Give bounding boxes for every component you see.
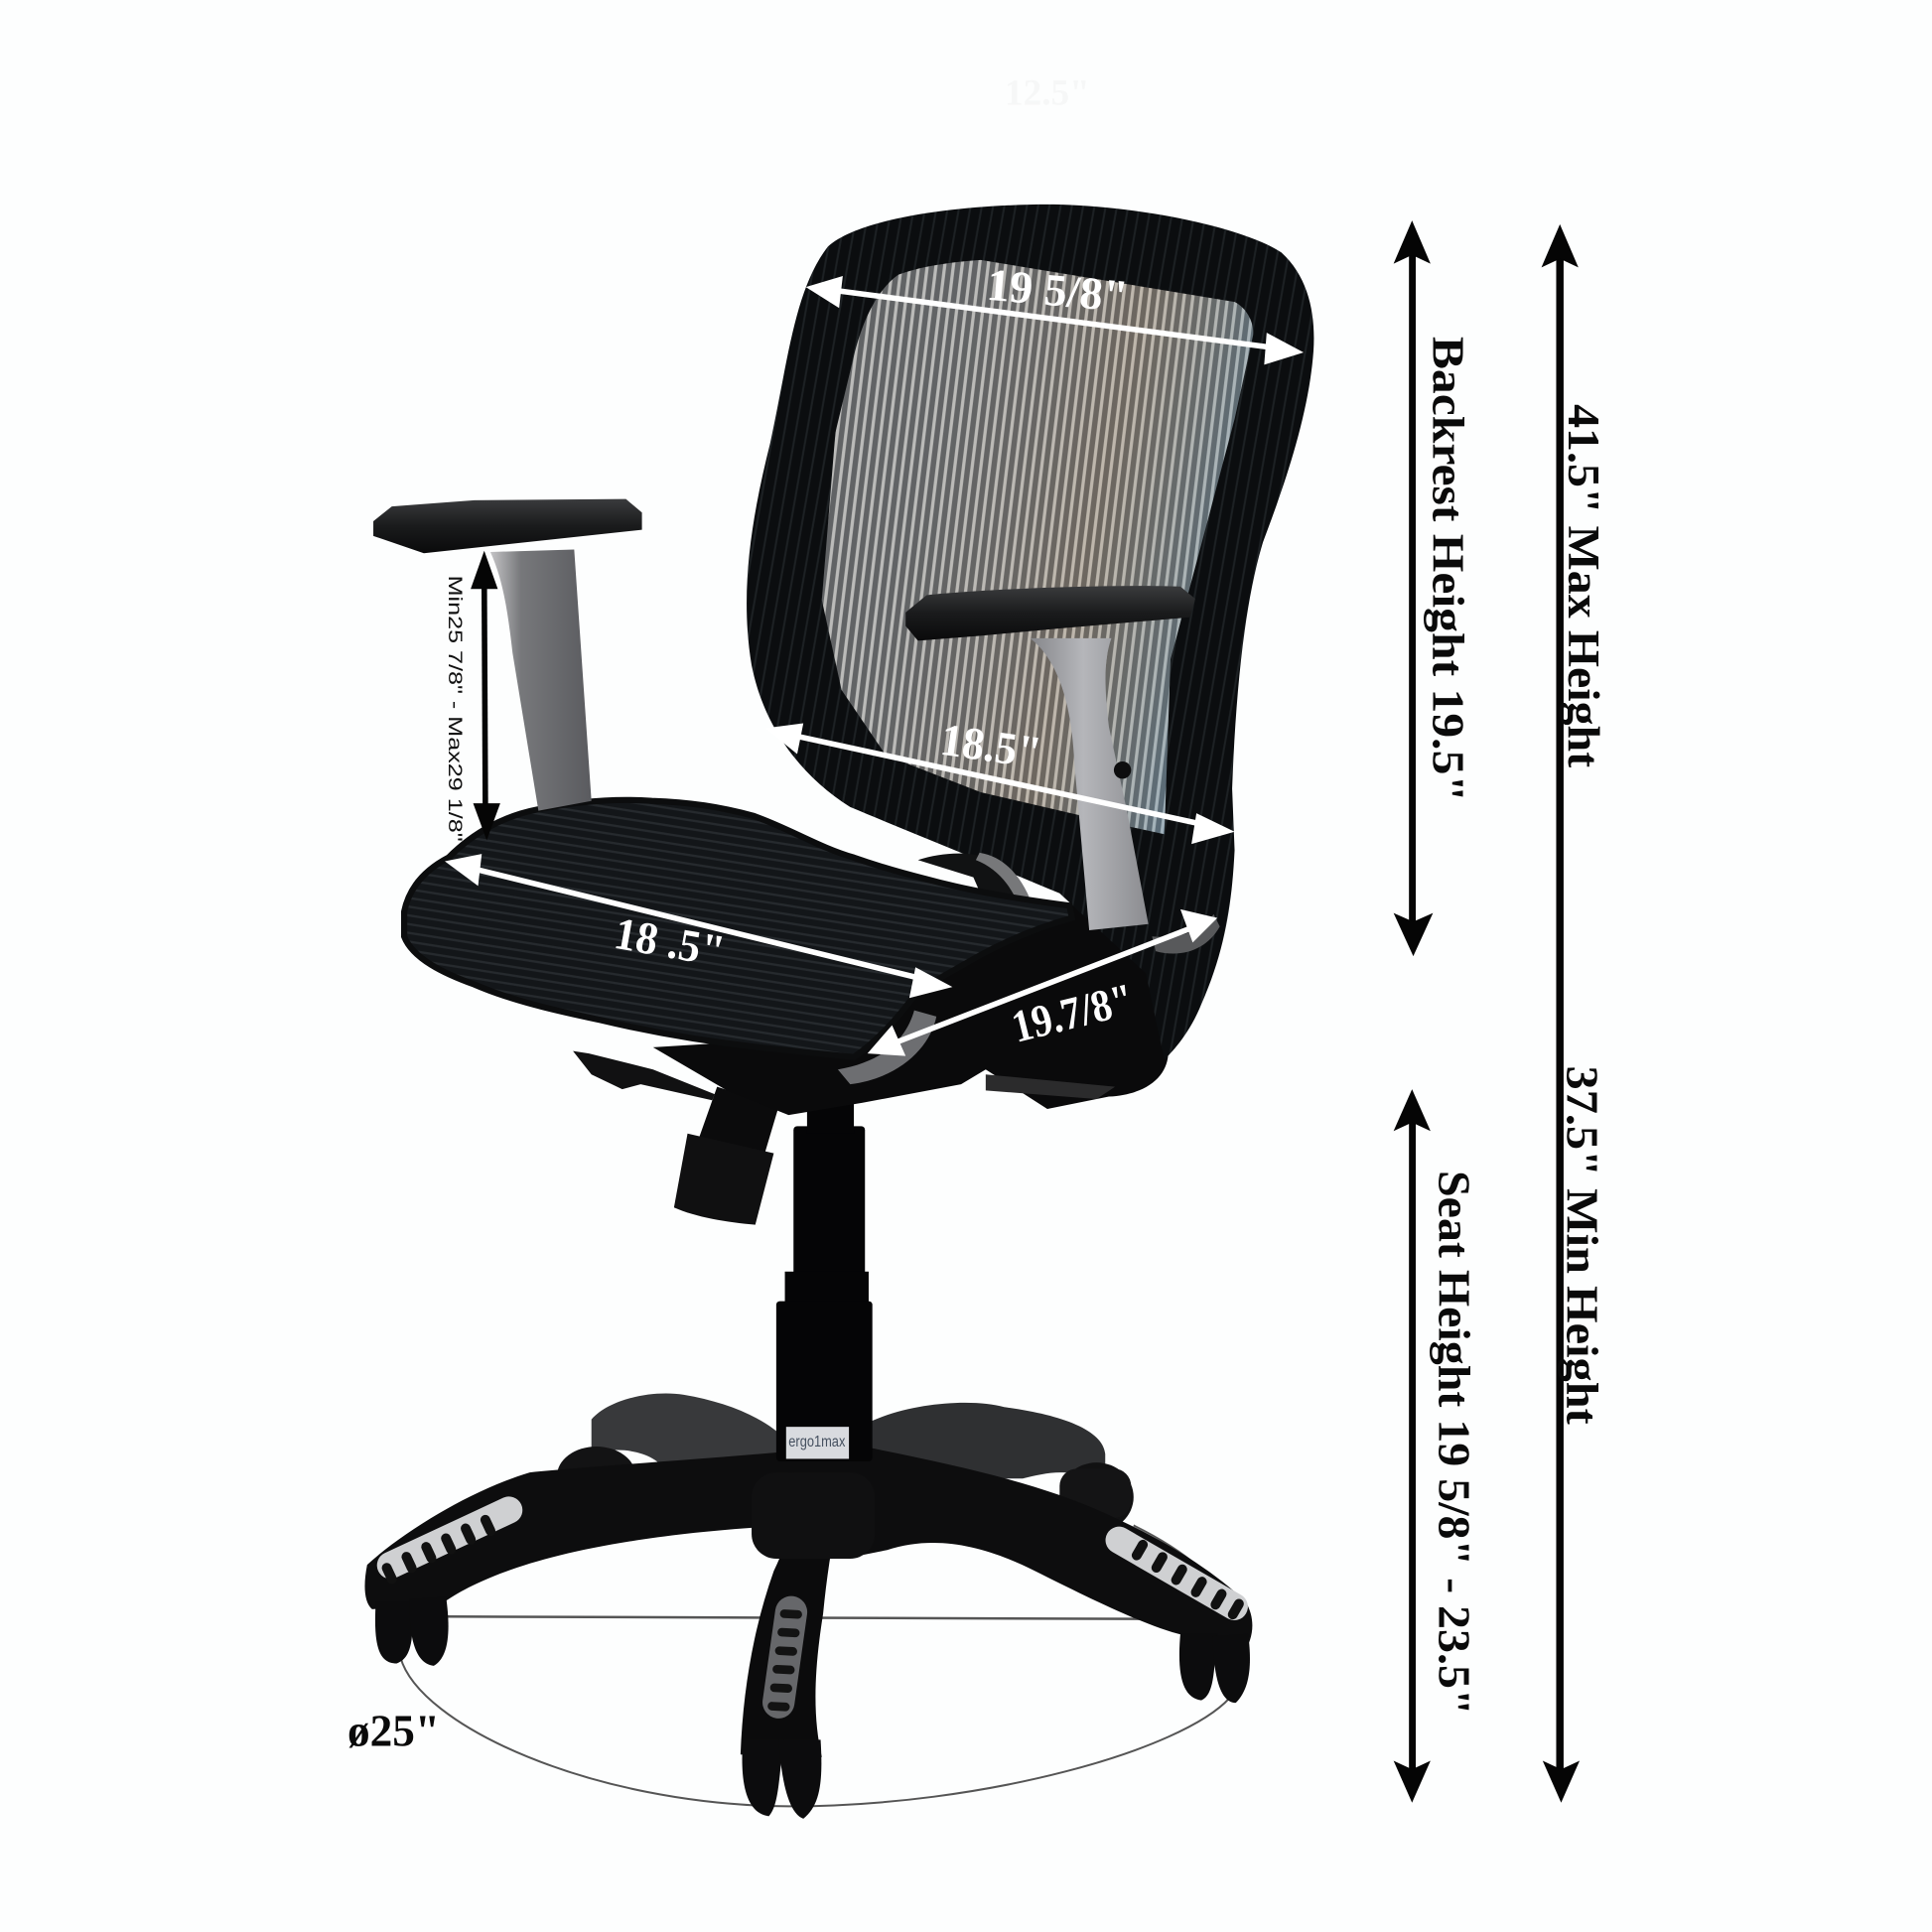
backrest frame bbox=[747, 205, 1313, 1059]
armrest height arrow bbox=[471, 551, 500, 840]
armrest knob bbox=[1114, 761, 1131, 778]
faint top label: 12.5" bbox=[1005, 72, 1090, 113]
tilt lever bbox=[573, 1051, 715, 1100]
side frame curve bbox=[1152, 914, 1220, 954]
label: 19 5/8: 19 5/8" bbox=[985, 259, 1131, 322]
label: 18 .5: 18 .5" bbox=[611, 907, 729, 977]
backrest upper width arrow bbox=[806, 276, 1304, 364]
label: 18.5: 18.5" bbox=[937, 714, 1044, 778]
label: armrest height range: Min25 7/8" - Max29 1/8" bbox=[444, 576, 466, 842]
label: base diameter: ø25" bbox=[347, 1706, 440, 1756]
brand label bbox=[786, 1427, 849, 1458]
backrest height arrow bbox=[1394, 220, 1433, 956]
silver leg inserts bbox=[372, 1492, 1253, 1721]
seat height arrow bbox=[1394, 1089, 1431, 1803]
gas lift column bbox=[776, 1084, 873, 1461]
right armrest pad bbox=[905, 586, 1195, 640]
label: max height: 41.5" Max Height bbox=[1559, 404, 1609, 768]
seat mechanism bbox=[653, 899, 1169, 1115]
chair base rear legs bbox=[557, 1394, 1134, 1532]
base diameter ellipse bbox=[400, 1525, 1236, 1806]
label: seat height: Seat Height 19 5/8" - 23.5" bbox=[1430, 1171, 1480, 1716]
seat bbox=[404, 800, 1072, 1057]
backrest mesh panel bbox=[822, 260, 1253, 834]
left armrest post bbox=[490, 550, 592, 811]
brand label: ergo1max bbox=[788, 1433, 845, 1450]
overall height arrow bbox=[1542, 224, 1580, 1803]
chair illustration bbox=[364, 205, 1313, 1819]
right armrest post bbox=[1031, 638, 1149, 930]
backrest lower width arrow bbox=[765, 724, 1235, 844]
caster wheels bbox=[375, 1596, 1250, 1819]
adjustment knob bbox=[674, 1087, 778, 1225]
label: 19.7/8: 19.7/8" bbox=[1007, 973, 1139, 1052]
seat depth arrow bbox=[445, 854, 952, 998]
left armrest pad bbox=[373, 499, 642, 553]
label: min height: 37.5" Min Height bbox=[1558, 1066, 1608, 1425]
backrest support bbox=[918, 853, 1033, 911]
chair base front legs bbox=[364, 1448, 1252, 1757]
under-seat bracket bbox=[986, 1074, 1115, 1099]
label: backrest height: Backrest Height 19.5" bbox=[1423, 337, 1473, 802]
curved seat support strap bbox=[838, 1011, 936, 1084]
seat width arrow bbox=[868, 909, 1217, 1056]
